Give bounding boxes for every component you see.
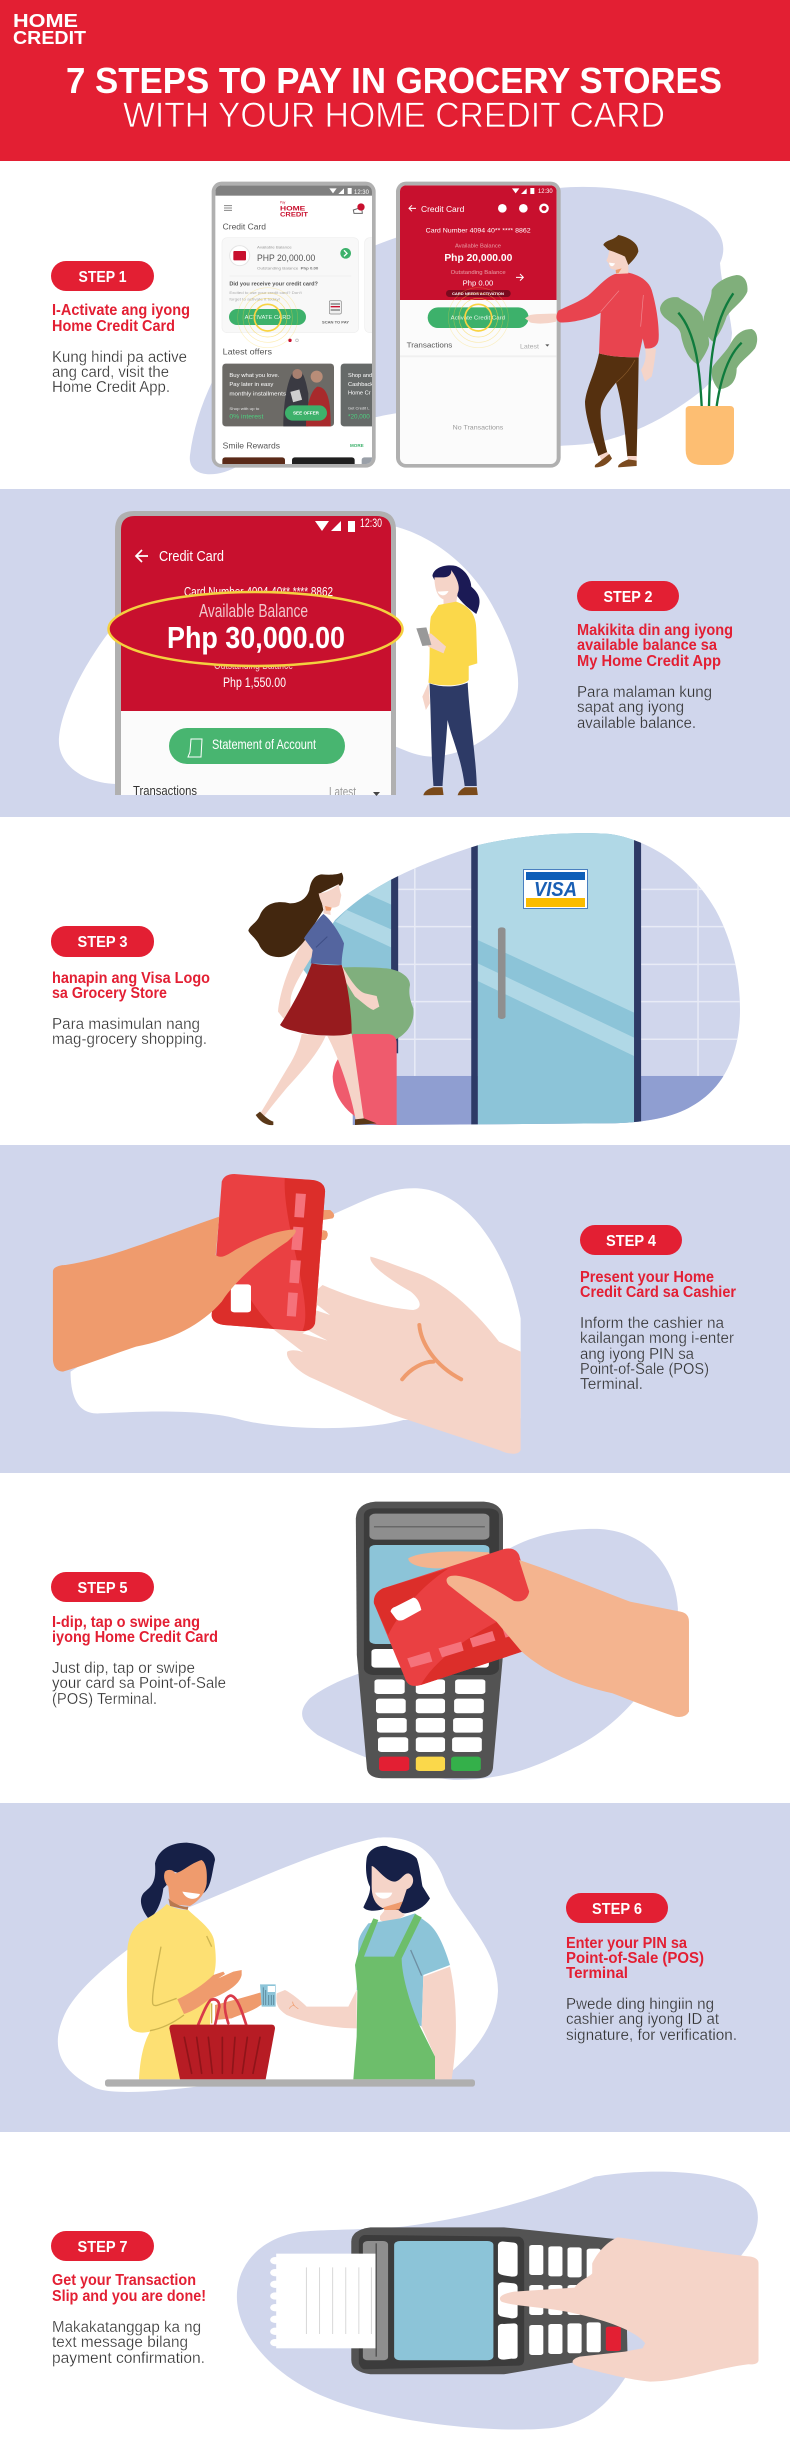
phone: credit card screen: CARD NEEDS ACTIVATION	[452, 292, 504, 296]
step 1 text: Home Credit App.	[52, 379, 170, 396]
step 2 text: Para malaman kung	[577, 684, 712, 701]
step 2 heading	[577, 622, 733, 670]
phone: home screen: Available Balance	[257, 245, 293, 250]
phone: home screen: PHP 20,000.00	[257, 253, 315, 263]
highlight: available balance: Php 30,000.00	[167, 620, 345, 655]
phone: home screen: ACTIVATE CARD	[245, 315, 291, 321]
logo: Home Credit	[13, 11, 86, 48]
phone: home screen: Smile Rewards	[223, 441, 281, 451]
illustration: store front with visa door	[302, 830, 746, 1127]
illustration: man with plant	[525, 235, 757, 467]
phone: home screen: CREDIT	[280, 212, 308, 219]
phone: home screen: *20,000	[348, 413, 370, 420]
step 3 text: Para masimulan nang	[52, 1016, 200, 1033]
illustration blob: step 6	[58, 1837, 498, 2092]
phone: home screen: 0% interest	[229, 413, 264, 420]
phone: home screen: 12:30	[354, 190, 370, 196]
phone: available balance: Card Number 4094 40** **** 8862	[184, 585, 333, 599]
phone: home screen	[212, 182, 378, 468]
title	[66, 61, 722, 135]
step 2 heading: My Home Credit App	[577, 653, 721, 670]
step 5 text	[52, 1660, 226, 1708]
panel: step 7	[51, 2172, 759, 2430]
step 4 heading	[580, 1269, 736, 1301]
phone: credit card screen: Transactions	[407, 341, 453, 350]
step 6 heading: Point-of-Sale (POS)	[566, 1950, 704, 1967]
panel: step 2	[0, 489, 790, 820]
phone: home screen: Buy what you love.	[229, 373, 280, 379]
step 6 text	[566, 1996, 737, 2044]
header banner	[0, 0, 790, 161]
step 7 text: text message bilang	[52, 2334, 188, 2351]
phone: available balance: Credit Card	[159, 548, 224, 565]
phone: home screen: Shop and	[348, 373, 372, 379]
step 5 text: your card sa Point-of-Sale	[52, 1675, 226, 1692]
phone: credit card screen: Activate Credit Card	[451, 316, 505, 322]
phone: credit card screen: 12:30	[538, 189, 553, 195]
phone: available balance: Latest	[329, 784, 356, 799]
step 7 text: payment confirmation.	[52, 2350, 205, 2367]
step 5 heading: I-dip, tap o swipe ang	[52, 1614, 200, 1631]
step 4 text: kailangan mong i-enter	[580, 1330, 734, 1347]
button: statement of account	[169, 728, 345, 764]
phone: home screen: Credit Card	[223, 221, 266, 231]
step 7 badge: STEP 7	[78, 2239, 128, 2256]
step 3 text: mag-grocery shopping.	[52, 1031, 207, 1048]
step 6 text: Pwede ding hingiin ng	[566, 1996, 714, 2013]
step 1 heading	[52, 302, 190, 335]
phone: credit card screen	[396, 182, 561, 468]
step 6 badge	[566, 1893, 668, 1923]
phone: home screen: SEE OFFER	[293, 411, 320, 416]
phone: home screen: Pay	[280, 200, 285, 204]
step 5 badge	[51, 1572, 154, 1602]
phone: credit card screen: Card Number 4094 40** **** 8862	[426, 228, 531, 235]
phone: home screen: forget to activate it today!	[229, 297, 280, 302]
step 6 text: cashier ang iyong ID at	[566, 2011, 720, 2028]
step 7 text	[52, 2319, 205, 2367]
step 7 heading: Slip and you are done!	[52, 2288, 206, 2305]
panel: step 3	[51, 830, 746, 1127]
phone: credit card screen: Outstanding Balance	[451, 270, 506, 276]
phone: home screen: HOME	[280, 205, 306, 212]
illustration: woman with phone	[416, 565, 480, 795]
phone: home screen: Excited to use your credit card? Don't	[229, 290, 303, 295]
button: statement of account: Statement of Account	[212, 736, 316, 752]
highlight: available balance: Available Balance	[199, 601, 308, 621]
phone: available balance: Transactions	[133, 783, 197, 798]
phone: home screen: MORE	[350, 443, 364, 448]
step 6 text: signature, for verification.	[566, 2027, 737, 2044]
step 5 heading: iyong Home Credit Card	[52, 1629, 218, 1646]
step 4 text: ang iyong PIN sa	[580, 1346, 694, 1363]
title: 7 STEPS TO PAY IN GROCERY STORES	[66, 61, 722, 101]
illustration: customer and cashier	[105, 1843, 475, 2087]
icon: tap rings	[238, 288, 298, 348]
phone: available balance: 12:30	[360, 516, 382, 530]
phone: available balance	[108, 511, 402, 820]
phone: credit card screen: Credit Card	[421, 204, 465, 214]
step 2 text: available balance.	[577, 715, 696, 732]
phone: home screen: Outstanding Balance	[257, 267, 298, 271]
logo: visa	[524, 870, 588, 908]
logo: Home Credit: HOME	[13, 11, 78, 31]
step 3 badge: STEP 3	[78, 934, 128, 951]
step 2 text	[577, 684, 712, 732]
phone: home screen: Shop with up to	[229, 406, 260, 411]
step 7 heading	[52, 2272, 206, 2305]
phone: credit card screen: Php 0.00	[463, 281, 493, 288]
step 1 text: Kung hindi pa active	[52, 349, 187, 366]
step 3 heading: sa Grocery Store	[52, 985, 167, 1002]
phone: home screen: Latest offers	[223, 347, 273, 357]
step 1 heading: I-Activate ang iyong	[52, 302, 190, 319]
step 1 badge: STEP 1	[78, 269, 127, 286]
illustration: card tapped on POS terminal	[302, 1502, 689, 1780]
receipt slip	[270, 2254, 375, 2348]
phone: home screen: Php 0.00	[301, 267, 318, 271]
step 1 text: ang card, visit the	[52, 364, 169, 381]
panel: step 4	[0, 1145, 790, 1473]
illustration blob: step 2	[59, 527, 518, 784]
icon: tap rings	[448, 288, 508, 348]
highlight: available balance	[108, 592, 402, 666]
phone: credit card screen: Available Balance	[455, 243, 501, 249]
step 3 heading	[52, 970, 210, 1002]
illustration: card handover	[53, 1174, 521, 1454]
phone: credit card screen: Latest	[520, 343, 539, 350]
panel: step 6	[0, 1803, 790, 2132]
step 5 text: (POS) Terminal.	[52, 1691, 157, 1708]
step 2 text: sapat ang iyong	[577, 699, 684, 716]
phone: home screen: monthly installments	[229, 391, 286, 397]
step 4 text	[580, 1315, 734, 1393]
step 3 text	[52, 1016, 207, 1048]
step 3 heading: hanapin ang Visa Logo	[52, 970, 210, 987]
illustration: plant and woman walking	[248, 873, 414, 1125]
phone: home screen: Did you receive your credit card?	[229, 282, 318, 288]
step 5 badge: STEP 5	[78, 1580, 128, 1597]
step 1 badge	[51, 261, 154, 291]
step 4 heading: Present your Home	[580, 1269, 714, 1286]
step 5 heading	[52, 1614, 218, 1646]
phone: home screen: Pay later in easy	[229, 382, 273, 388]
step 6 heading: Enter your PIN sa	[566, 1935, 687, 1952]
step 4 text: Terminal.	[580, 1376, 643, 1393]
step 5 text: Just dip, tap or swipe	[52, 1660, 195, 1677]
step 2 heading: available balance sa	[577, 637, 717, 654]
phone: available balance: Php 1,550.00	[223, 675, 286, 690]
step 6 heading	[566, 1935, 704, 1982]
title: WITH YOUR HOME CREDIT CARD	[123, 96, 665, 135]
phone: home screen: Home Cr	[348, 391, 371, 397]
panel: step 1	[51, 182, 757, 474]
logo: visa: VISA	[534, 879, 577, 901]
step 4 text: Point-of-Sale (POS)	[580, 1361, 709, 1378]
phone: credit card screen: No Transactions	[453, 424, 503, 431]
step 2 heading: Makikita din ang iyong	[577, 622, 733, 639]
step 3 badge	[51, 926, 154, 957]
phone: available balance: Outstanding Balance	[214, 658, 293, 672]
step 4 badge	[580, 1225, 682, 1255]
step 4 text: Inform the cashier na	[580, 1315, 724, 1332]
phone: home screen: Get Credit L	[348, 405, 370, 410]
step 4 heading: Credit Card sa Cashier	[580, 1284, 736, 1301]
phone: credit card screen: Php 20,000.00	[444, 253, 513, 264]
step 7 heading: Get your Transaction	[52, 2272, 196, 2289]
illustration blob: step 1	[190, 187, 732, 474]
logo: Home Credit: CREDIT	[13, 28, 86, 48]
step 6 badge: STEP 6	[592, 1901, 642, 1918]
step 4 badge: STEP 4	[606, 1233, 656, 1250]
step 1 heading: Home Credit Card	[52, 318, 175, 335]
step 7 text: Makakatanggap ka ng	[52, 2319, 201, 2336]
step 2 badge: STEP 2	[604, 589, 653, 606]
step 1 text	[52, 349, 187, 396]
phone: home screen: Cashback	[348, 382, 373, 388]
step 2 badge	[577, 581, 679, 611]
illustration: POS terminal printing slip	[237, 2172, 759, 2430]
step 6 heading: Terminal	[566, 1965, 628, 1982]
step 7 badge	[51, 2231, 154, 2261]
phone: home screen: SCAN TO PAY	[322, 321, 350, 325]
panel: step 5	[51, 1502, 689, 1780]
